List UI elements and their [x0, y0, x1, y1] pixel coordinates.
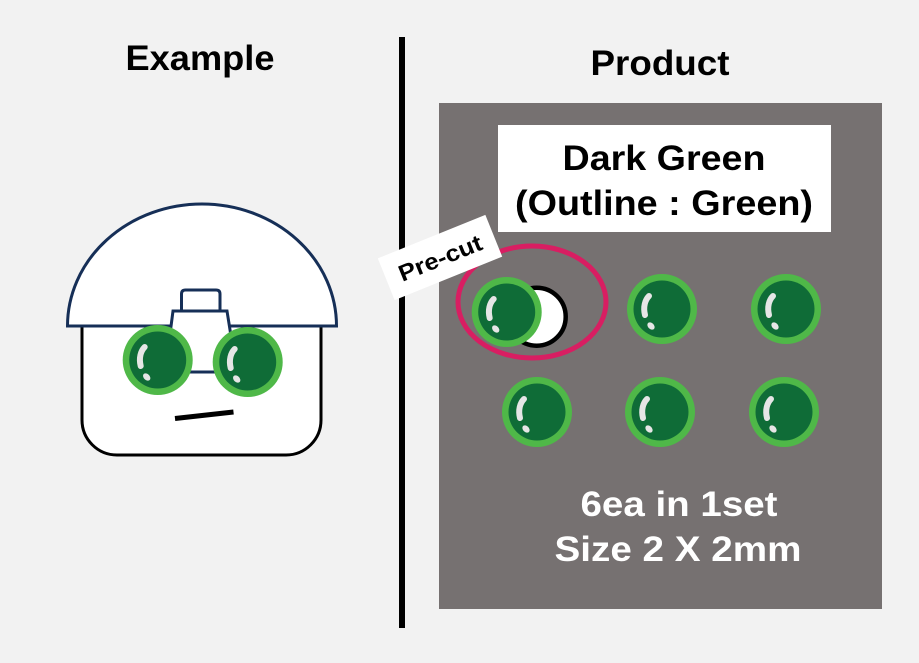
- character face: [82, 326, 321, 455]
- panel: example character: [68, 204, 336, 455]
- nose bridge: [170, 311, 231, 372]
- icon: left green eye: [123, 325, 193, 395]
- icon: eye sticker 2: [627, 274, 697, 344]
- size: Size 2 X 2mm: [554, 530, 802, 569]
- quantity: 6ea in 1set: [580, 485, 778, 524]
- panel: product sheet: [439, 103, 882, 609]
- product quantity and size: [554, 485, 802, 569]
- mouth: [175, 412, 234, 418]
- backing hole: [508, 288, 566, 346]
- heading: Example: Example: [126, 39, 274, 78]
- icon: eye sticker 5: [625, 377, 695, 447]
- icon: eye sticker 6: [749, 377, 819, 447]
- icon: eye sticker 3: [751, 274, 821, 344]
- vertical divider: [399, 37, 405, 628]
- product title box: [498, 125, 831, 232]
- outline colour: (Outline : Green): [515, 184, 813, 223]
- icon: eye sticker 4: [502, 377, 572, 447]
- character helmet dome: [68, 204, 336, 326]
- heading: Product: Product: [590, 44, 730, 83]
- pre-cut label: [378, 215, 502, 300]
- pre-cut sample: [458, 246, 606, 358]
- product name: Dark Green: [562, 139, 766, 178]
- helmet top tab: [182, 290, 220, 311]
- icon: right green eye: [213, 327, 283, 397]
- pre-cut label: Pre-cut: [395, 229, 486, 286]
- icon: peeled eye: [472, 277, 542, 347]
- highlight ring: [458, 246, 606, 358]
